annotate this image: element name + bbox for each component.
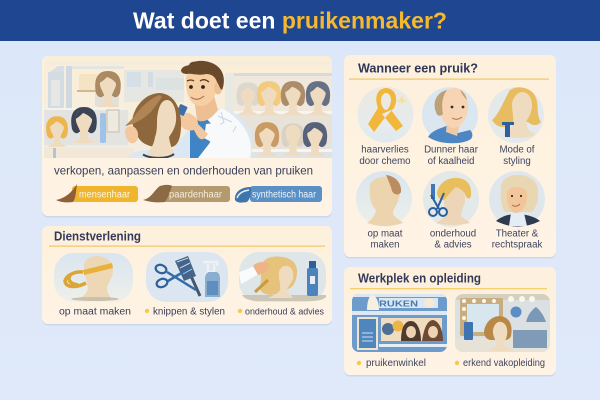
heading: Wanneer een pruik? xyxy=(358,60,478,76)
illustration: pruikenwinkel xyxy=(352,294,447,352)
panel: dienstverlening xyxy=(42,226,332,326)
icon: mode of styling xyxy=(488,87,544,143)
icon: dunner haar xyxy=(422,87,478,143)
label: op maat maken: maken xyxy=(370,240,400,250)
pill: paardenhaar xyxy=(143,185,230,202)
illustration: onderhoud en advies xyxy=(239,252,326,302)
label: onderhoud en advies: onderhoud & advies xyxy=(245,306,324,318)
mannequin with brown wig xyxy=(125,93,181,158)
pill: mensenhaar xyxy=(56,184,138,202)
icon: ribbon chemo xyxy=(358,86,414,142)
header band xyxy=(0,0,600,41)
shelf wigs right xyxy=(236,81,330,156)
label: mode of styling: styling xyxy=(503,156,531,167)
label: pruikenwinkel: pruikenwinkel xyxy=(366,358,426,369)
label: dunner haar of kaalheid: Dunner haar xyxy=(424,145,479,156)
title: Wat doet een pruikenmaker? xyxy=(133,8,447,34)
illustration: knippen en stylen xyxy=(146,252,228,302)
panel: verkopen xyxy=(42,56,332,218)
label: theater en rechtspraak: rechtspraak xyxy=(492,240,542,250)
illustration: vakopleiding xyxy=(455,294,550,352)
shelf wigs left xyxy=(46,71,121,147)
wig maker xyxy=(128,61,252,158)
label: knippen en stylen: knippen & stylen xyxy=(153,306,225,318)
arm and hand xyxy=(204,124,234,146)
heading: Dienstverlening xyxy=(54,228,141,244)
label: op maat maken: op maat xyxy=(367,229,403,240)
pill: mensenhaar: mensenhaar xyxy=(79,190,131,200)
illustration: op maat maken xyxy=(54,253,133,302)
illustration: pruikenwinkel: RUKEN xyxy=(379,298,418,308)
neck and head xyxy=(194,96,218,121)
label: onderhoud en advies: & advies xyxy=(434,240,472,250)
pill: synthetisch haar xyxy=(235,186,322,203)
label: onderhoud en advies: onderhoud xyxy=(430,229,476,240)
icon: op maat maken head xyxy=(356,171,412,227)
label: mode of styling: Mode of xyxy=(499,145,535,156)
label: theater en rechtspraak: Theater & xyxy=(496,229,539,240)
pill: paardenhaar: paardenhaar xyxy=(169,190,223,200)
pill: synthetisch haar: synthetisch haar xyxy=(252,190,317,200)
panel: werkplek en opleiding xyxy=(344,267,556,376)
icon: theater en rechtspraak xyxy=(489,171,545,227)
shop walls xyxy=(44,62,332,158)
label: erkend vakopleiding: erkend vakopleiding xyxy=(463,358,545,369)
label: dunner haar of kaalheid: of kaalheid xyxy=(428,156,474,167)
icon: onderhoud en advies xyxy=(423,171,479,227)
label: haarverlies door chemo: door chemo xyxy=(359,156,411,167)
label: haarverlies door chemo: haarverlies xyxy=(361,145,409,156)
label: op maat maken: op maat maken xyxy=(59,306,131,318)
panel: wanneer een pruik xyxy=(344,55,556,258)
heading: Werkplek en opleiding xyxy=(358,270,481,286)
hero illustration: wig shop xyxy=(44,56,332,158)
panel subtitle: verkopen, aanpassen en onderhouden van pruiken xyxy=(54,164,313,178)
coat body xyxy=(128,108,252,158)
